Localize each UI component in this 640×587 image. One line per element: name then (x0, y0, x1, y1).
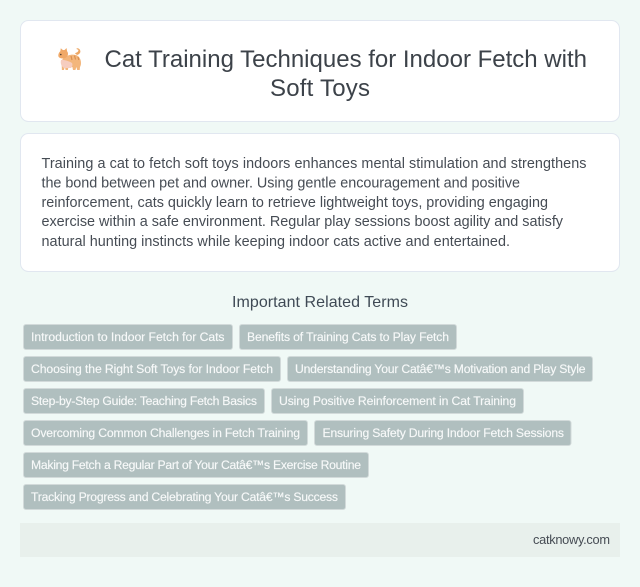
panel: title card (20, 20, 620, 122)
intro paragraph: exercise within a safe environment. Regular play sessions boost agility and satisfy (42, 214, 564, 230)
panel: introduction text card (20, 134, 620, 272)
tag: motivation: Understanding Your Catâ€™s Motivation and Play Style (295, 362, 586, 376)
heading: important related terms: Important Related Terms (232, 294, 408, 311)
tag: introduction: Introduction to Indoor Fetch for Cats (31, 330, 224, 344)
title text: Cat Training Techniques for Indoor Fetch with (104, 46, 587, 73)
tag: challenges: Overcoming Common Challenges in Fetch Training (31, 426, 300, 440)
footer (20, 523, 620, 557)
tag: step-by-step (24, 388, 264, 414)
tag list (24, 324, 592, 510)
tag: introduction (24, 324, 232, 350)
tag: positive reinforcement (272, 388, 524, 414)
tag: motivation (288, 356, 592, 382)
tag: step-by-step: Step-by-Step Guide: Teaching Fetch Basics (31, 394, 257, 408)
title text: Soft Toys (270, 75, 370, 102)
intro paragraph: the bond between pet and owner. Using gentle encouragement and positive (42, 176, 520, 192)
tag: choosing toys: Choosing the Right Soft Toys for Indoor Fetch (31, 362, 273, 376)
intro paragraph (42, 156, 586, 250)
tag: tracking progress (24, 484, 346, 510)
tag: safety (314, 420, 571, 446)
tag: benefits: Benefits of Training Cats to Play Fetch (247, 330, 449, 344)
title text (104, 46, 587, 102)
tag: positive reinforcement: Using Positive Reinforcement in Cat Training (279, 394, 516, 408)
tag: routine (24, 452, 368, 478)
tag: safety: Ensuring Safety During Indoor Fetch Sessions (322, 426, 564, 440)
intro paragraph: natural hunting instincts while keeping indoor cats active and entertained. (42, 234, 510, 250)
footer site name: catknowy.com (533, 532, 610, 547)
tag: tracking progress: Tracking Progress and Celebrating Your Catâ€™s Success (31, 490, 338, 504)
intro paragraph: Training a cat to fetch soft toys indoors enhances mental stimulation and strengthens (42, 156, 586, 172)
intro paragraph: reinforcement, cats quickly learn to retrieve lightweight toys, providing engaging (42, 195, 548, 211)
tag: choosing toys (24, 356, 280, 382)
tag: benefits (240, 324, 456, 350)
tag: routine: Making Fetch a Regular Part of Your Catâ€™s Exercise Routine (31, 458, 361, 472)
tag: challenges (24, 420, 308, 446)
icon: cat (58, 48, 81, 70)
